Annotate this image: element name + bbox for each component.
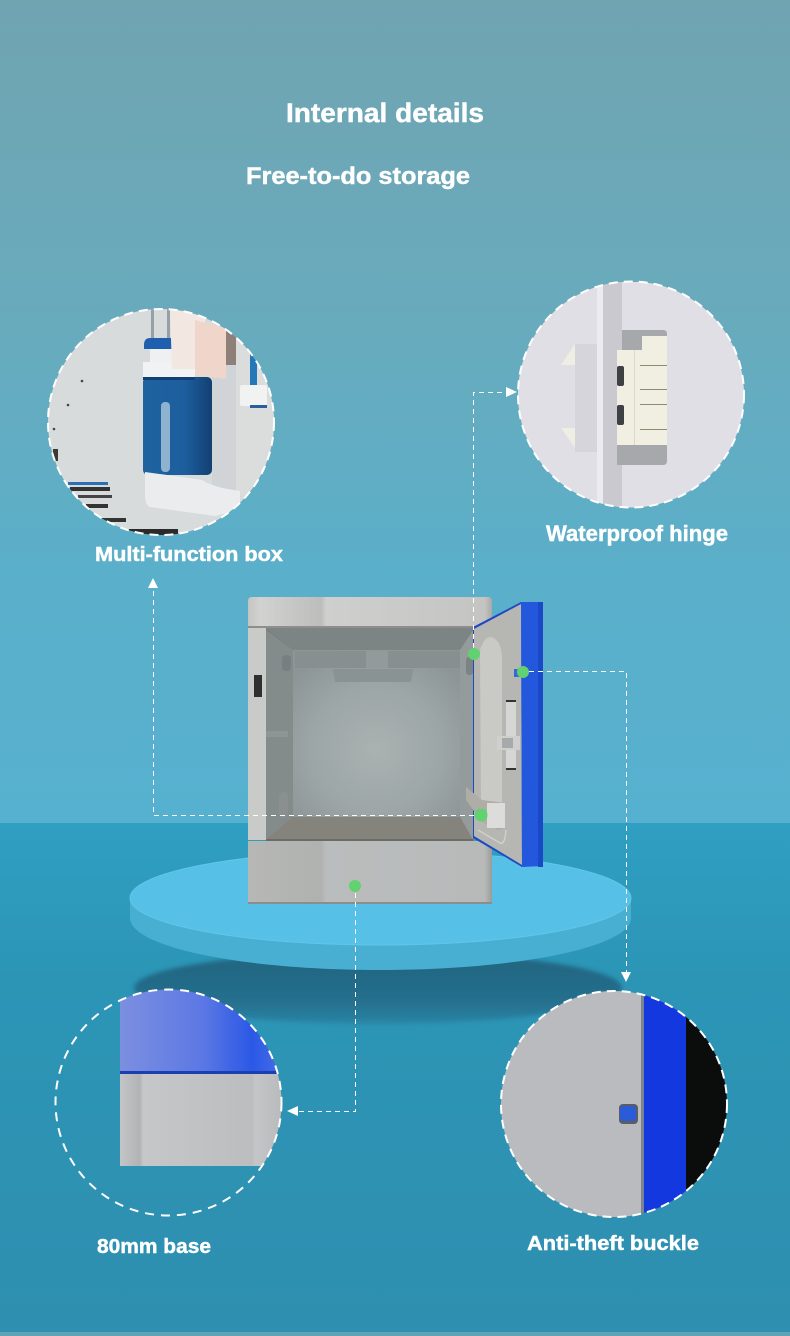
upper shelf fittings bbox=[295, 651, 460, 668]
locker left post bbox=[248, 628, 266, 840]
connector: hinge bbox=[474, 387, 517, 648]
round platform bbox=[130, 851, 631, 970]
callout: waterproof hinge photo bbox=[518, 282, 744, 508]
platform shadow bbox=[134, 952, 622, 1024]
open door bbox=[473, 602, 522, 867]
label: multi-function box: Multi-function box bbox=[95, 544, 283, 566]
connector: multi-function box bbox=[148, 578, 474, 816]
latch slot bbox=[254, 675, 262, 697]
connector: anti-theft buckle bbox=[529, 672, 631, 982]
top cap bbox=[248, 597, 492, 628]
connector: base bbox=[287, 893, 356, 1116]
label: waterproof hinge: Waterproof hinge bbox=[546, 521, 728, 546]
locker bbox=[248, 597, 543, 904]
title: Internal details bbox=[286, 98, 484, 128]
callout: base photo bbox=[56, 985, 285, 1216]
label: anti-theft buckle: Anti-theft buckle bbox=[527, 1233, 699, 1255]
door buckle bbox=[514, 669, 522, 677]
door blue edge bbox=[521, 602, 543, 867]
callout: anti-theft buckle photo bbox=[501, 991, 727, 1217]
subtitle: Free-to-do storage bbox=[246, 163, 470, 190]
base bbox=[248, 841, 492, 904]
marker dots bbox=[349, 648, 529, 892]
locker interior bbox=[266, 628, 474, 841]
label: 80mm base: 80mm base bbox=[97, 1236, 211, 1258]
callout: multi-function box photo bbox=[48, 309, 276, 536]
